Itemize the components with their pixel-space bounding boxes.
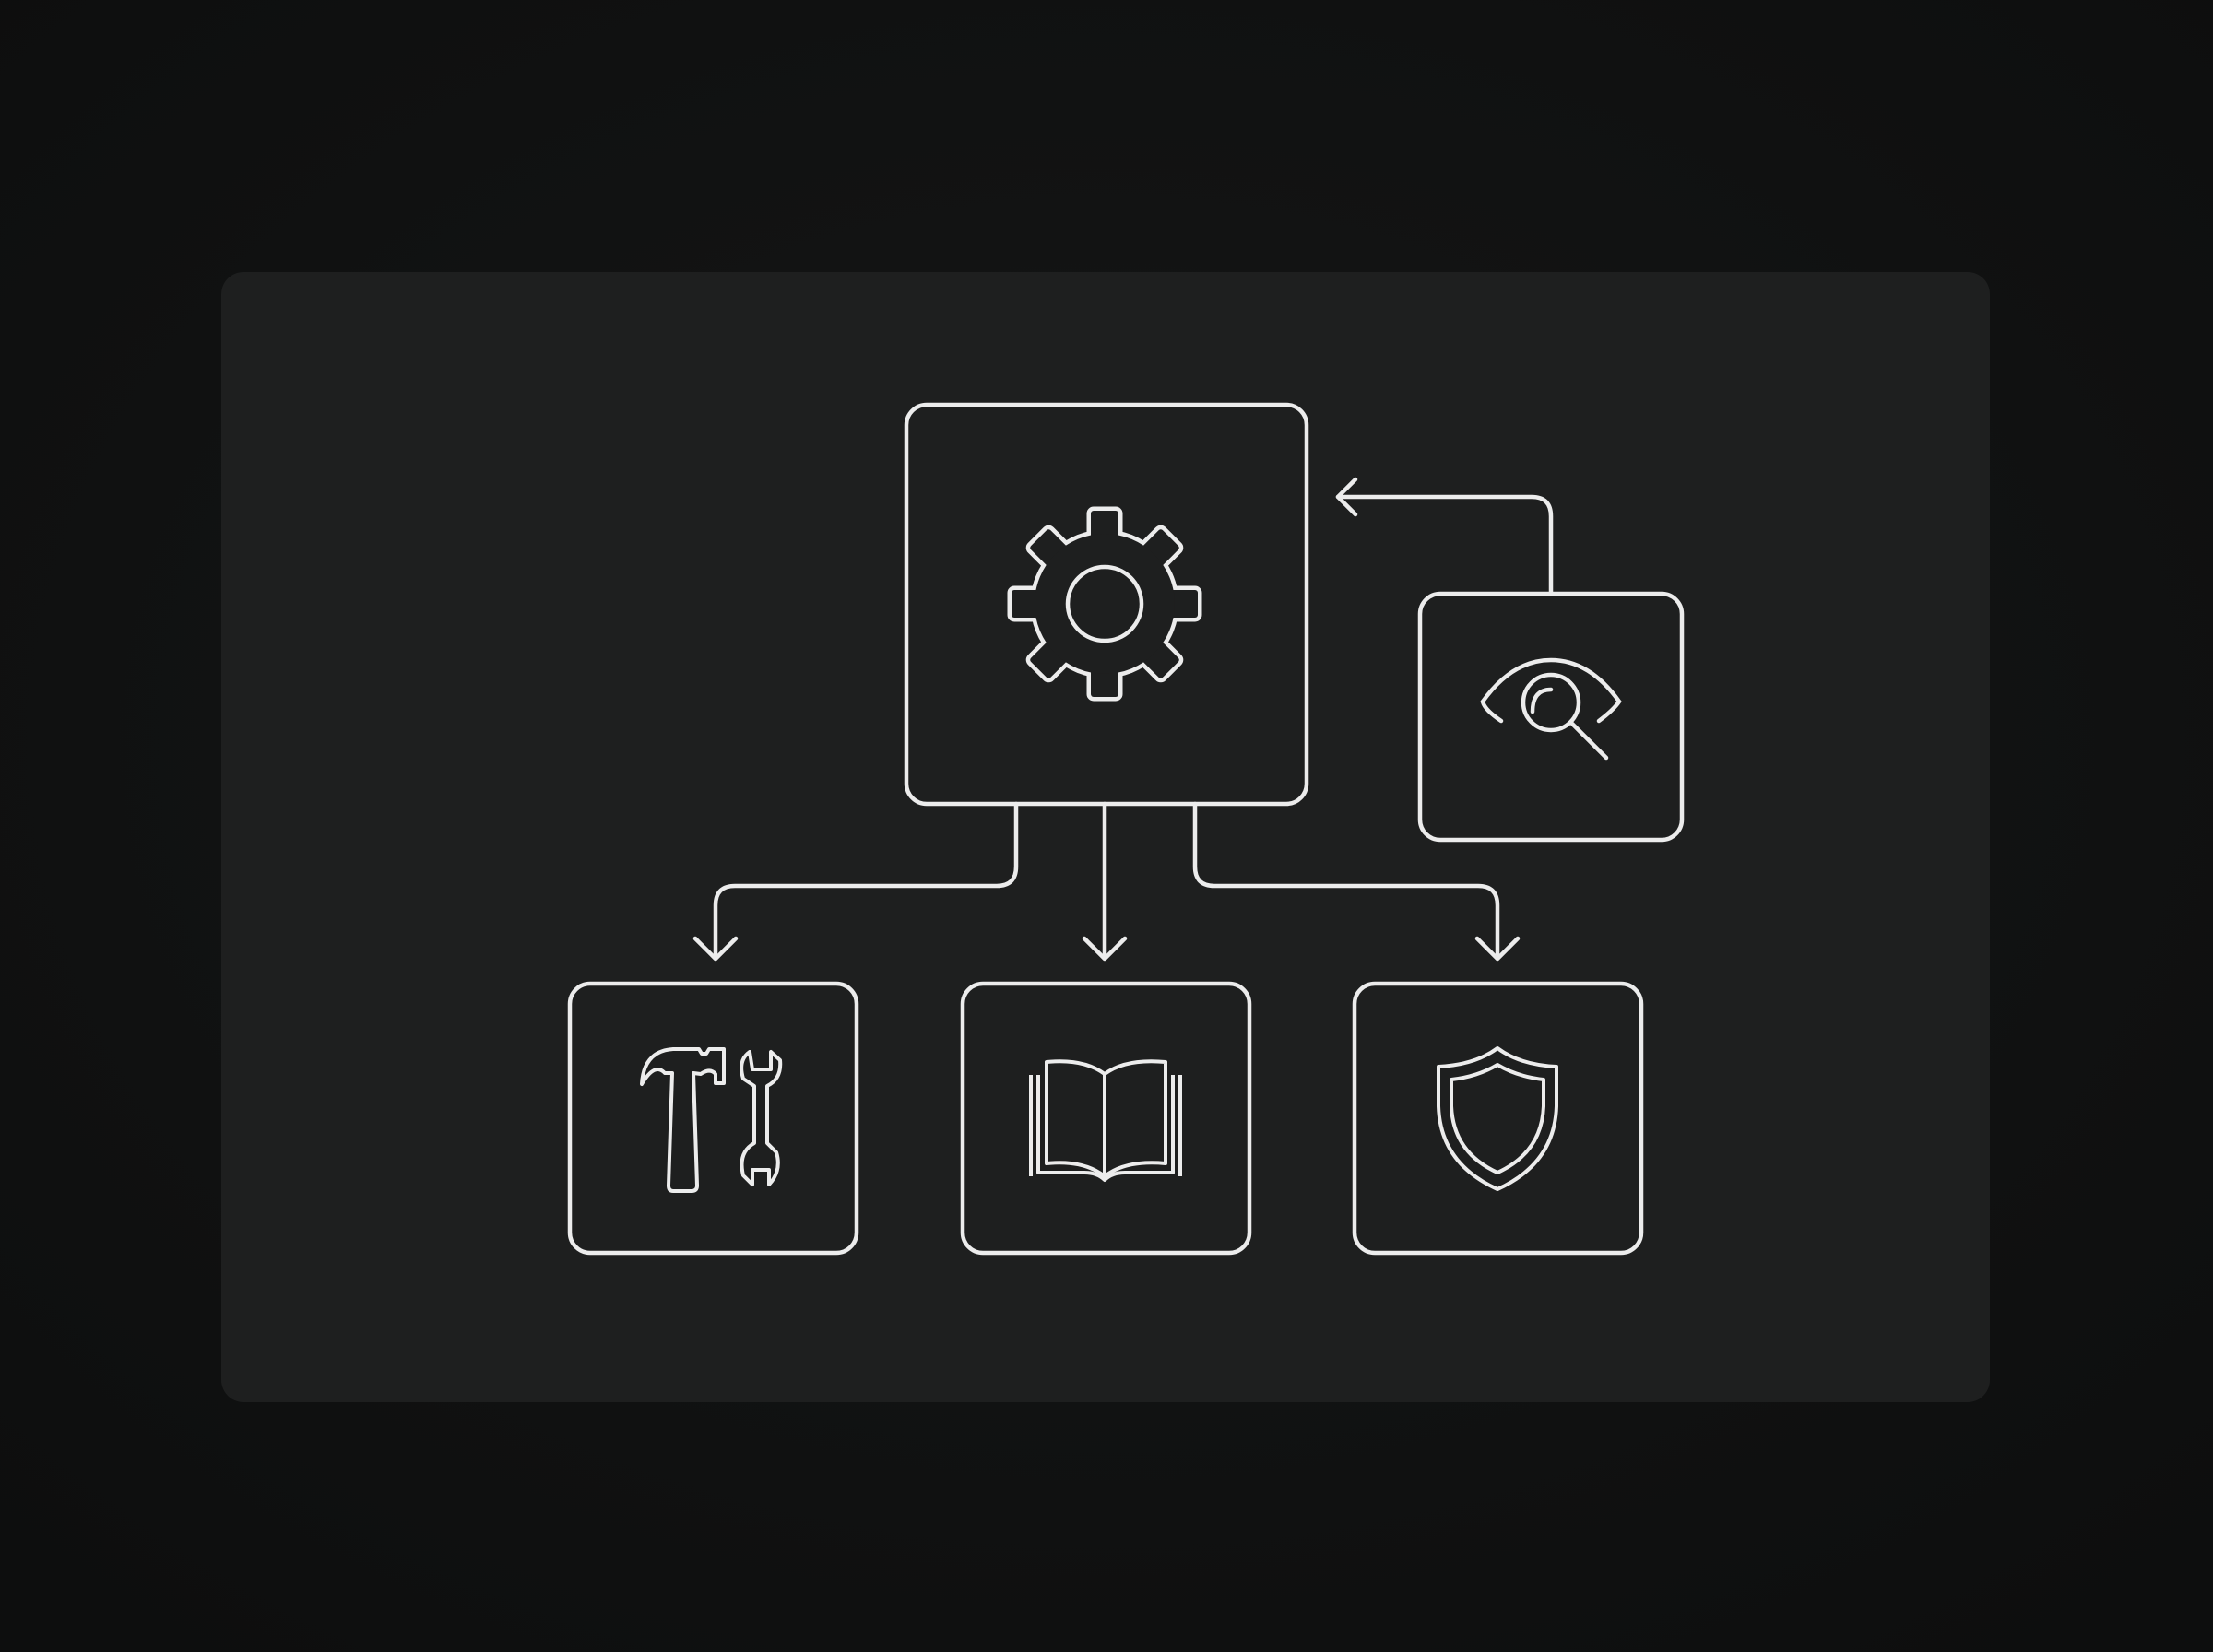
box: eye inspect [1420, 594, 1682, 840]
arrow: feedback from eye to gear [1338, 479, 1551, 594]
arrow: gear to tools [695, 804, 1016, 959]
box: tools [570, 984, 857, 1253]
panel: main card [221, 272, 1990, 1402]
icon: open book [1031, 1061, 1180, 1180]
arrow: gear to book [1084, 804, 1125, 959]
icon: eye with magnifier [1483, 660, 1619, 758]
box: shield [1355, 984, 1641, 1253]
box: gear [906, 405, 1307, 804]
icon: hammer and wrench [642, 1049, 780, 1191]
box: book [963, 984, 1249, 1253]
arrow: gear to shield [1195, 804, 1518, 959]
icon: shield [1438, 1048, 1556, 1189]
icon: gear [1012, 511, 1198, 697]
